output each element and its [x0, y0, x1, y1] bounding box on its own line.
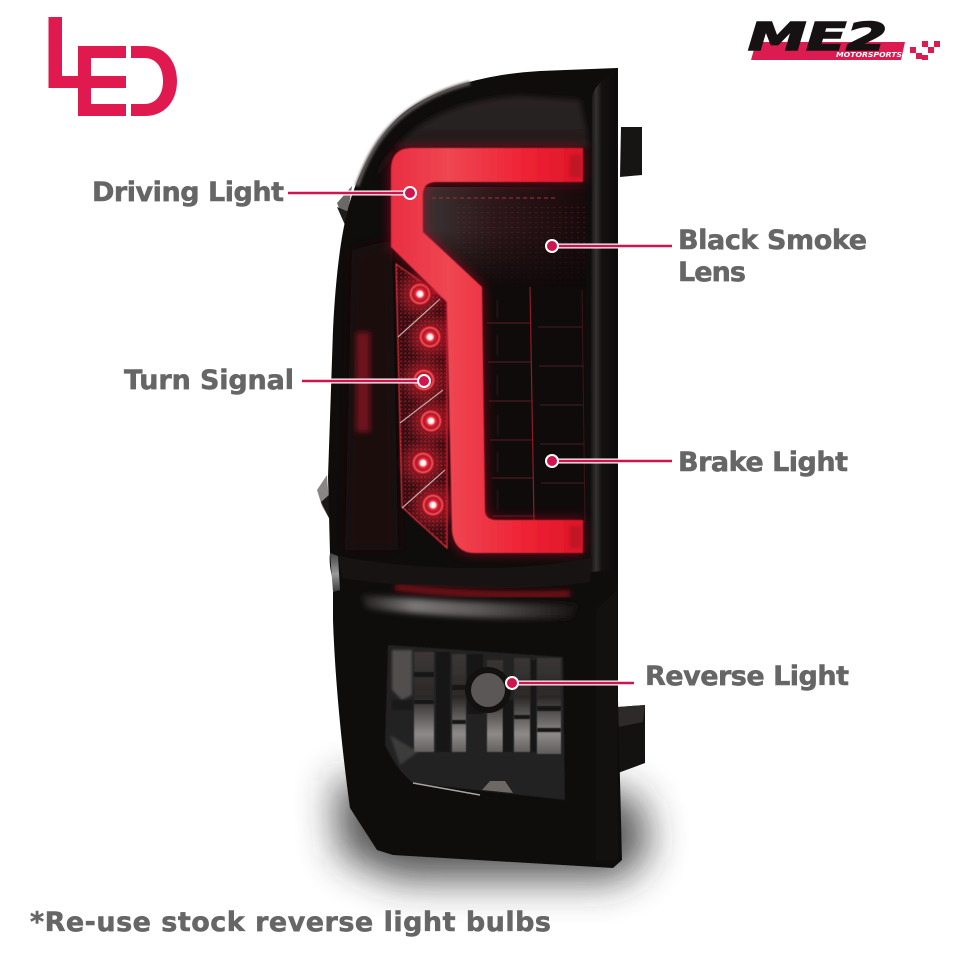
reverse light lens — [385, 645, 565, 800]
logo: ME2 Motorsports — [748, 15, 940, 60]
brake light cells — [483, 287, 586, 522]
callout: Reverse Light: Reverse Light — [645, 661, 849, 692]
callout: Turn Signal — [124, 365, 430, 396]
callout: Reverse Light — [506, 661, 849, 692]
lower rim — [596, 590, 618, 860]
callout: Black Smoke Lens — [546, 225, 867, 288]
outer rim highlight — [357, 83, 470, 186]
callout: Driving Light: Driving Light — [92, 177, 284, 208]
LED light bar — [391, 148, 583, 553]
mounting tabs — [317, 127, 645, 773]
lower reflector — [482, 781, 513, 793]
logo: ME2 Motorsports: ME2 — [748, 15, 887, 59]
callout: Black Smoke Lens: Lens — [678, 257, 746, 288]
callout: Black Smoke Lens: Black Smoke — [678, 225, 867, 256]
drop shadow — [335, 780, 650, 880]
callout: Turn Signal: Turn Signal — [124, 365, 294, 396]
logo: LED — [48, 17, 177, 116]
callout: Driving Light — [92, 177, 416, 208]
upper bezel — [372, 96, 590, 185]
housing body — [328, 68, 622, 868]
turn signal cluster — [394, 264, 459, 548]
smoke lens panel — [423, 187, 586, 287]
bulb socket — [465, 667, 511, 713]
right rim — [590, 72, 617, 572]
divider band — [330, 553, 592, 619]
callout: Brake Light — [546, 447, 848, 478]
callout: Brake Light: Brake Light — [678, 447, 848, 478]
left red glow — [345, 240, 398, 550]
tail light assembly — [317, 68, 645, 868]
footnote: *Re-use stock reverse light bulbs — [30, 907, 551, 938]
logo: ME2 Motorsports: MOTORSPORTS — [836, 51, 902, 59]
